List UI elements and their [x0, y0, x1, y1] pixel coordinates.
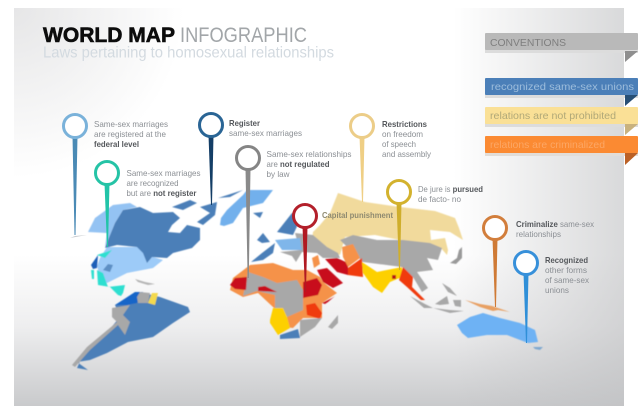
- mauritania red: [230, 277, 247, 290]
- text: criminalize: Criminalize same-sex: [516, 220, 594, 229]
- colombia: [115, 292, 143, 305]
- africa grey: [243, 272, 303, 317]
- text: restrictions: Restrictions: [382, 120, 427, 129]
- text: restrictions: and assembly: [382, 150, 432, 159]
- usa: [97, 247, 163, 283]
- text: de jure: De jure is pursued: [418, 185, 483, 194]
- legend ribbon: recognized same-sex unions: recognized same-sex unions: [491, 81, 634, 93]
- text: de jure: de facto- no: [418, 195, 461, 204]
- legend ribbon: conventions: [485, 33, 638, 62]
- southern africa yellow: [270, 308, 290, 335]
- text: not regulated: are not regulated: [266, 160, 330, 169]
- pin: de jure: [388, 180, 410, 270]
- scandinavia: [277, 213, 300, 235]
- pin: restrictions: [350, 114, 374, 202]
- pin: federal level: [64, 114, 87, 238]
- text: criminalize: relationships: [516, 230, 561, 239]
- madagascar: [328, 315, 338, 329]
- pin: not regulated: [236, 146, 260, 278]
- india: [362, 262, 402, 293]
- text: recognized not registered: are recognized: [126, 179, 179, 188]
- pin: criminalize: [484, 216, 506, 307]
- text: federal level: are registered at the: [94, 130, 166, 139]
- text: restrictions: of speech: [382, 140, 416, 149]
- usa inner state: [103, 264, 113, 272]
- text: recognized not registered: but are not register: [126, 189, 197, 198]
- text: de jure: [418, 185, 483, 204]
- pakistan: [348, 258, 363, 277]
- saudi arabia: [317, 268, 343, 288]
- text: capital punishment: Capital punishment: [322, 211, 393, 220]
- africa: [230, 263, 337, 328]
- title: [43, 24, 307, 47]
- russia: [312, 193, 463, 255]
- tasmania: [533, 347, 543, 350]
- venezuela: [137, 292, 150, 303]
- text: criminalize: [516, 220, 594, 239]
- text: register: Register: [229, 119, 261, 128]
- text: recognized other forms: other forms: [545, 266, 587, 275]
- greenland: [220, 190, 273, 226]
- title: WORLD MAP: [43, 24, 175, 47]
- text: recognized other forms: [545, 256, 589, 295]
- text: federal level: Same-sex marriages: [94, 120, 168, 129]
- arctic islands: [172, 190, 243, 225]
- australia: [457, 313, 538, 343]
- subtitle: Laws pertaining to homosexual relationships: [43, 44, 334, 62]
- text: register: same-sex marriages: [229, 129, 302, 138]
- southeast asia islands: [410, 283, 464, 313]
- text: recognized other forms: of same-sex: [545, 276, 589, 285]
- east africa red: [306, 303, 322, 319]
- south africa: [280, 329, 300, 339]
- legend ribbon: relations are criminalized: [485, 136, 638, 165]
- text: restrictions: on freedom: [382, 130, 423, 139]
- nigeria red: [258, 286, 277, 292]
- pin: recognized not registered: [96, 162, 118, 247]
- world map: [72, 190, 543, 370]
- california: [91, 255, 98, 269]
- andes countries: [72, 305, 130, 367]
- south america: [77, 292, 190, 370]
- legend ribbon: relations are criminalized: relations are criminalized: [490, 139, 605, 151]
- text: recognized not registered: Same-sex marriages: [126, 169, 200, 178]
- text: recognized not registered: [126, 169, 200, 198]
- new guinea: [465, 300, 510, 312]
- burma: [399, 267, 425, 300]
- asia grey: [340, 235, 442, 292]
- legend ribbon: relations are not prohibited: relations are not prohibited: [490, 110, 616, 122]
- text: not regulated: [266, 150, 352, 179]
- pin: recognized other forms: [514, 252, 538, 343]
- guyana: [148, 293, 158, 305]
- text: federal level: federal level: [94, 140, 139, 149]
- legend ribbon: recognized same-sex unions: [485, 78, 638, 106]
- mexico and central america: [91, 250, 125, 296]
- caribbean: [135, 279, 155, 285]
- turkey orange: [312, 255, 320, 268]
- text: not regulated: Same-sex relationships: [266, 150, 352, 159]
- kazakhstan orange: [342, 244, 360, 267]
- text: recognized other forms: Recognized: [545, 256, 588, 265]
- pin: capital punishment: [294, 204, 316, 292]
- japan: [450, 247, 462, 264]
- sudan red: [303, 278, 322, 298]
- title: INFOGRAPHIC: [180, 24, 307, 47]
- iceland: [253, 212, 263, 218]
- spain france: [251, 243, 275, 262]
- legend ribbon: relations are not prohibited: [485, 107, 638, 135]
- text: not regulated: by law: [266, 170, 290, 179]
- text: federal level: [94, 120, 168, 149]
- uk: [257, 233, 270, 243]
- pin: register: [200, 114, 222, 205]
- bhutan: [392, 275, 396, 279]
- iran: [325, 258, 348, 275]
- text: recognized other forms: unions: [545, 286, 569, 295]
- legend ribbon: conventions: CONVENTIONS: [490, 37, 566, 49]
- north america: canada: [105, 207, 200, 263]
- horn red: [322, 296, 335, 304]
- text: register: [229, 119, 302, 138]
- western europe: [275, 238, 302, 250]
- east europe grey: [280, 233, 340, 262]
- text: restrictions: [382, 120, 432, 159]
- north america: alaska: [88, 203, 137, 247]
- southeast africa grey: [300, 318, 322, 337]
